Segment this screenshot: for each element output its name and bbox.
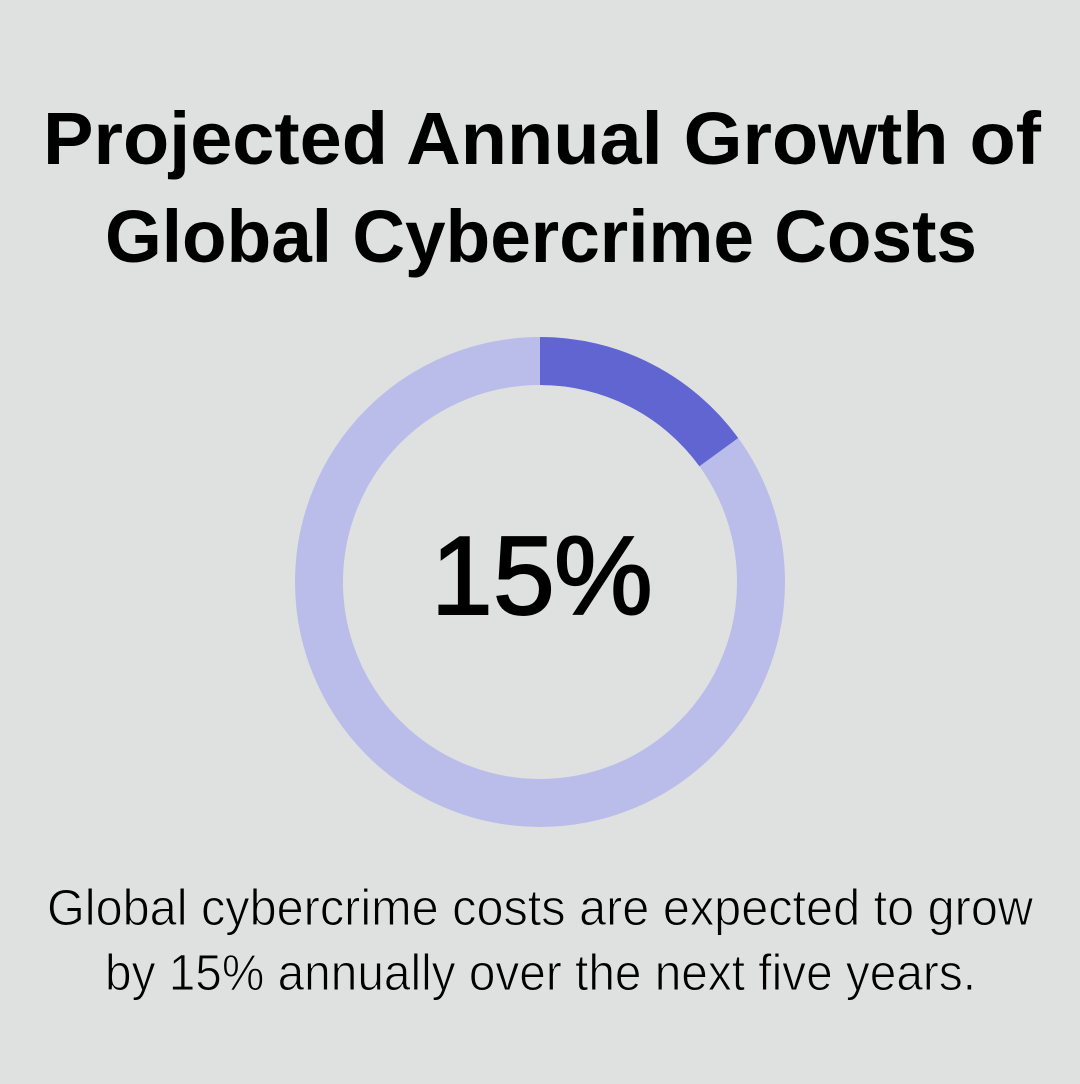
description	[47, 879, 1033, 1001]
description: Global cybercrime costs are expected to grow	[47, 879, 1033, 936]
donut segment: 15%	[540, 337, 738, 466]
title	[43, 97, 1041, 278]
description: by 15% annually over the next five years.	[105, 944, 976, 1001]
center value: 15%	[431, 514, 653, 638]
donut track: remaining share	[319, 361, 761, 803]
title: Global Cybercrime Costs	[105, 195, 977, 278]
title: Projected Annual Growth of	[43, 97, 1041, 180]
donut chart	[319, 337, 761, 803]
